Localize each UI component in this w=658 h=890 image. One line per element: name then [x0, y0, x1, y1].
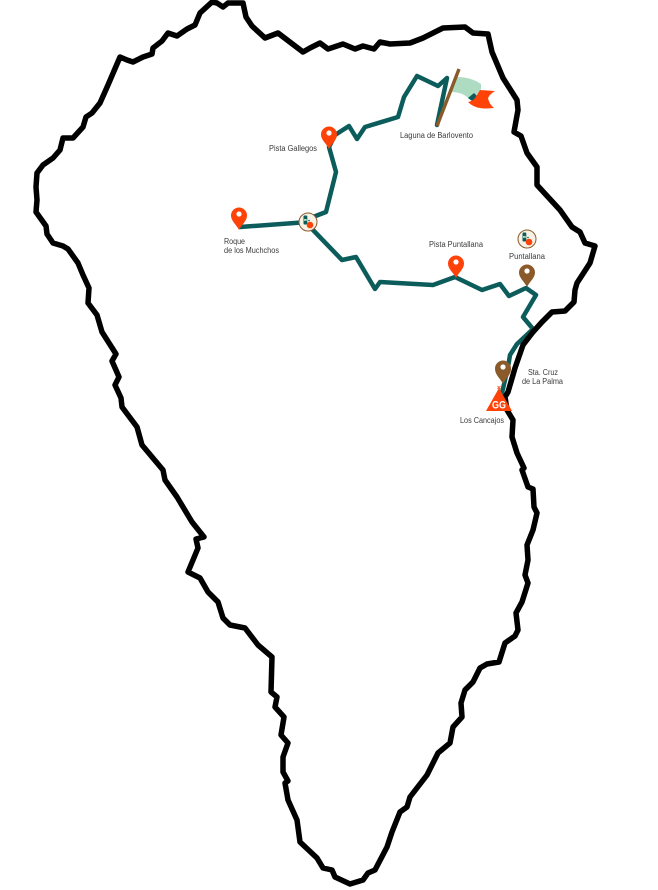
pin: Puntallana [519, 264, 535, 287]
pin: Santa Cruz de La Palma [495, 360, 511, 384]
icon: food stop on route [299, 213, 317, 231]
label: Puntallana: Puntallana [509, 252, 546, 261]
label: Sta. Cruz de La Palma [522, 368, 563, 386]
icon: Los Cancajos start tent logo [486, 386, 512, 412]
label: Roque de los Muchchos [224, 237, 279, 255]
pin: Pista Gallegos [321, 126, 337, 149]
icon: Laguna de Barlovento flag [437, 69, 495, 126]
label: Pista Gallegos: Pista Gallegos [269, 144, 317, 153]
label: Roque de los Muchchos: de los Muchchos [224, 246, 279, 255]
icon: Los Cancajos start tent logo: GG [492, 400, 506, 412]
label: Sta. Cruz de La Palma: de La Palma [522, 377, 563, 386]
label: Sta. Cruz de La Palma: Sta. Cruz [528, 368, 558, 377]
pin: Pista Puntallana [448, 256, 464, 278]
route: green trail [240, 76, 536, 393]
label: Laguna de Barlovento: Laguna de Barlovento [400, 131, 474, 140]
icon: food stop Puntallana [518, 230, 536, 248]
label: Pista Puntallana: Pista Puntallana [429, 240, 484, 249]
label: Los Cancajos: Los Cancajos [460, 416, 504, 425]
label: Roque de los Muchchos: Roque [224, 237, 245, 246]
pin: Roque de los Muchachos [231, 208, 247, 230]
